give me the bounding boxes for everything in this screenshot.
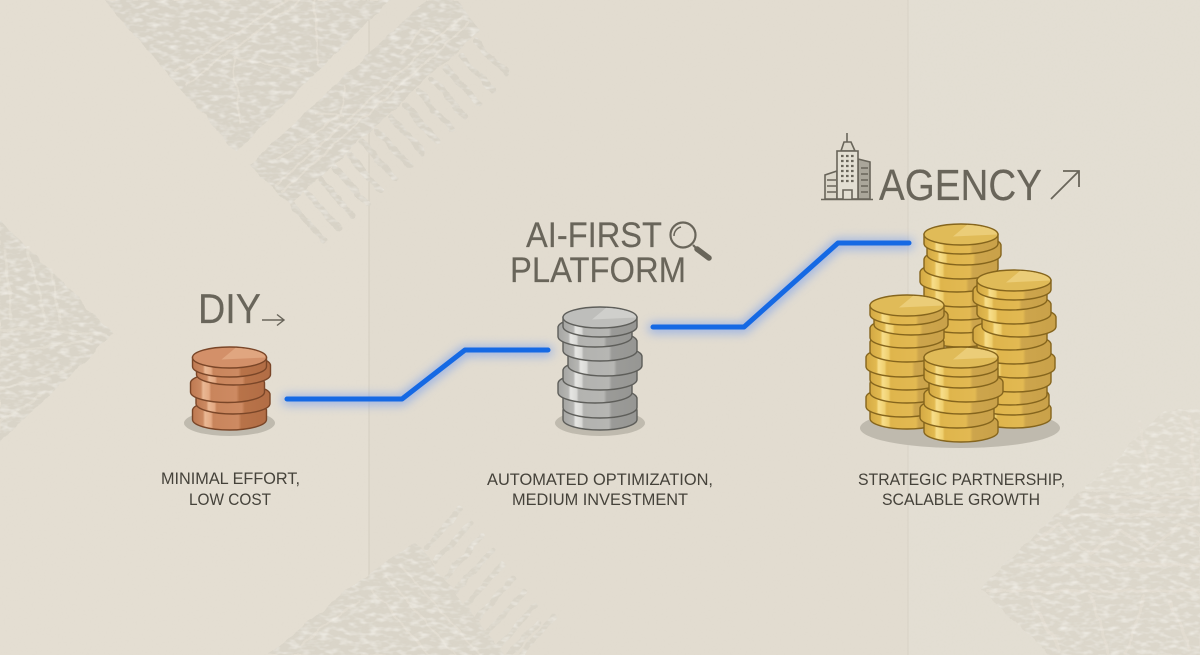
caption: DIY: MINIMAL EFFORT, (161, 470, 300, 488)
connector line: DIY to AI-first platform (287, 350, 548, 400)
silver coin stack (555, 307, 645, 436)
caption: AI-first platform: AUTOMATED OPTIMIZATION, (487, 471, 713, 489)
icon: right arrow (262, 314, 284, 326)
heading: DIY: DIY (198, 285, 261, 332)
panel: AI-first platform (487, 216, 713, 509)
panel: agency (821, 133, 1079, 509)
caption: DIY: LOW COST (189, 491, 271, 509)
connector line: AI-first platform to agency (653, 243, 909, 328)
left stack (866, 295, 948, 429)
rug pattern: left (0, 220, 113, 443)
back stack (920, 224, 1001, 347)
rug pattern: bottom centre (267, 508, 554, 655)
heading: AI-first platform: PLATFORM (510, 251, 686, 290)
copper coin stack (184, 347, 275, 436)
rug pattern: bottom right (980, 410, 1200, 655)
caption: agency: SCALABLE GROWTH (882, 491, 1040, 509)
icon: office building (821, 133, 873, 200)
rug pattern: top (105, 0, 507, 241)
right stack (973, 270, 1056, 428)
heading: agency: AGENCY (879, 161, 1042, 210)
panel: DIY (161, 285, 300, 509)
caption: DIY (161, 470, 300, 509)
caption: AI-first platform (487, 471, 713, 509)
icon: up-right arrow (1051, 171, 1079, 199)
caption: agency: STRATEGIC PARTNERSHIP, (858, 471, 1065, 489)
caption: agency (858, 471, 1065, 509)
gold coin stacks (860, 224, 1060, 448)
caption: AI-first platform: MEDIUM INVESTMENT (512, 491, 688, 509)
heading: AI-first platform (510, 216, 686, 290)
icon: magnifying glass (670, 222, 709, 258)
front stack (920, 347, 1003, 442)
heading: AI-first platform: AI-FIRST (526, 216, 662, 255)
